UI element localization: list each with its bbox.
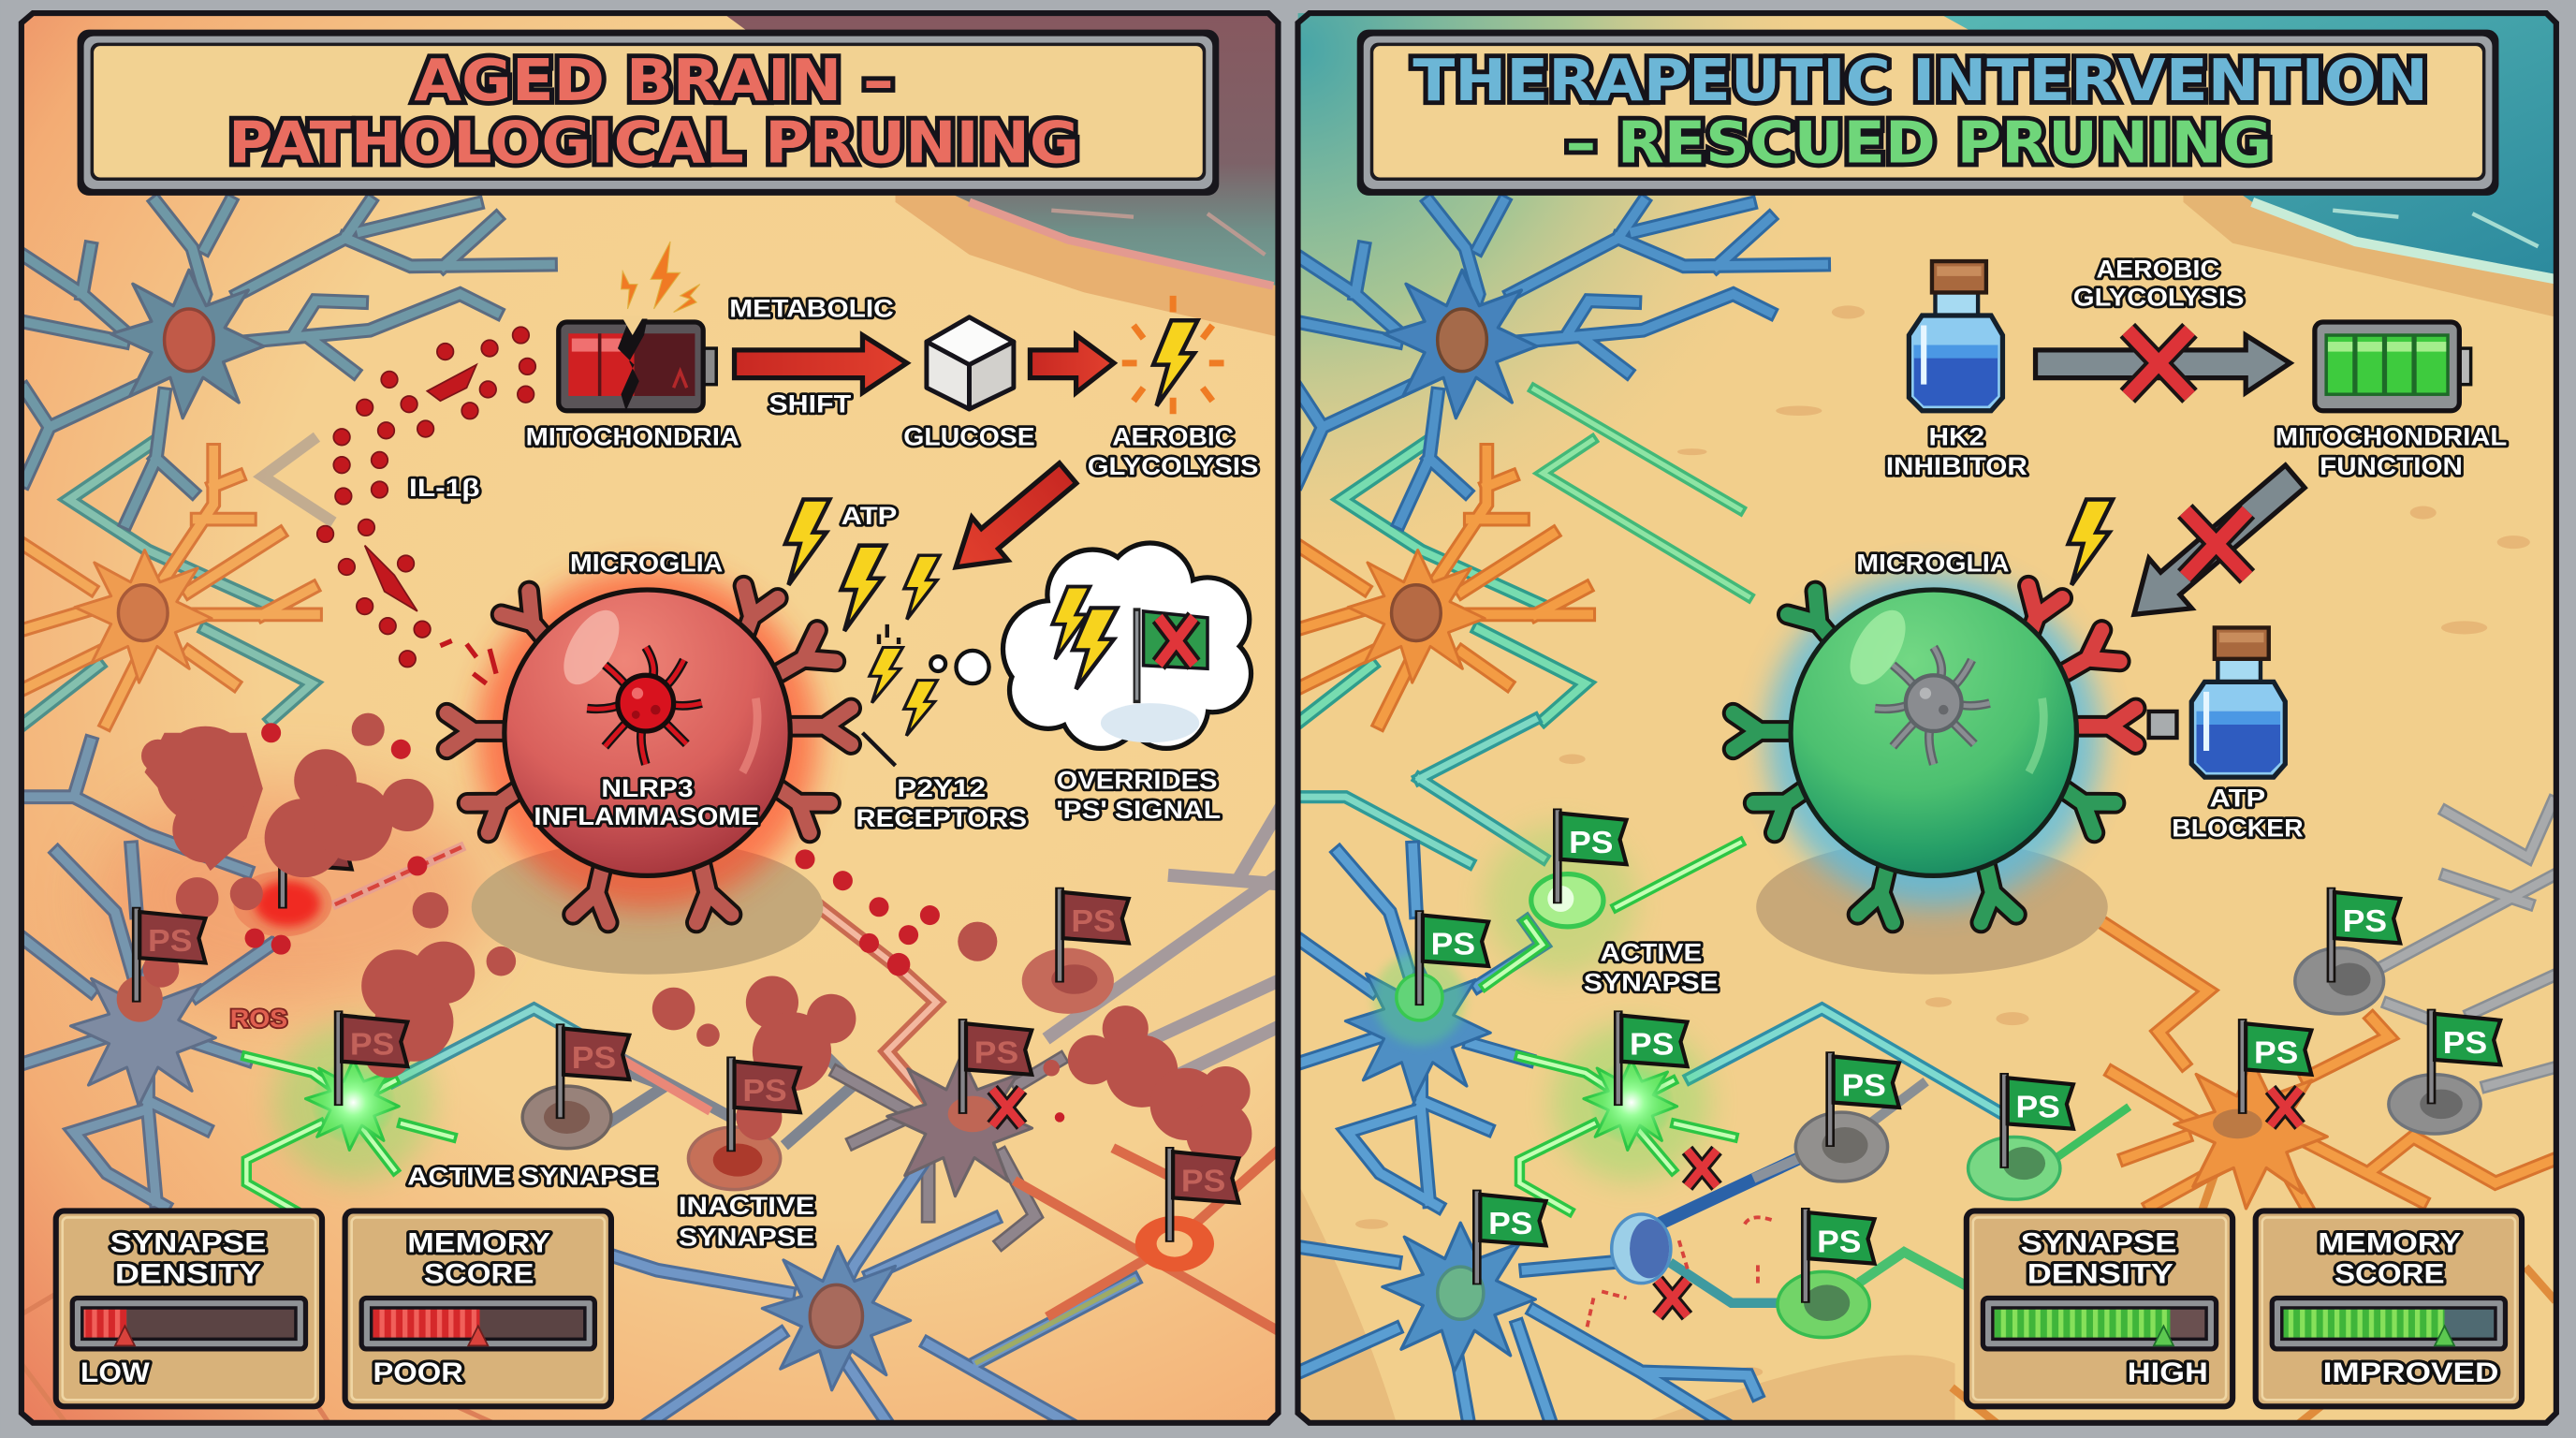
labels: therapeutic panel: HK2 (1928, 422, 1984, 451)
labels: therapeutic panel: FUNCTION (2320, 451, 2463, 480)
flags: phosphatidylserine eat-me signals, aged: PS (572, 1041, 616, 1076)
flags: phosphatidylserine eat-me signals, aged: PS (350, 1028, 394, 1063)
icon: ATP bolt (2069, 500, 2113, 585)
icon: silenced inflammasome (1875, 647, 1990, 764)
panel: therapeutic intervention (1298, 13, 2556, 1423)
labels: aged panel: 'PS' SIGNAL (1057, 795, 1221, 824)
thought cloud: overrides PS signal (930, 546, 1249, 746)
neuron network background (22, 202, 1278, 1423)
arrow: glucose to glycolysis (1030, 335, 1114, 392)
left panel background (22, 13, 1278, 1423)
flags: phosphatidylserine signals, rescued: PS (2343, 904, 2387, 939)
arrow: blocked aerobic glycolysis (2036, 330, 2291, 396)
stat panel: memory score poor (345, 1211, 611, 1406)
labels: aged panel: RECEPTORS (856, 803, 1027, 832)
labels: aged panel: METABOLIC (729, 294, 894, 323)
labels: aged panel: OVERRIDES (1057, 765, 1218, 794)
flags: phosphatidylserine eat-me signals, aged: PS (1181, 1164, 1225, 1198)
labels: aged panel: ATP (842, 501, 897, 530)
connector: ATP blocker to receptor (2149, 712, 2176, 738)
icon: NLRP3 inflammasome (587, 647, 702, 764)
icon: healthy mitochondrial battery (2315, 322, 2471, 411)
labels: aged panel: MICROGLIA (570, 549, 723, 578)
flags: phosphatidylserine signals, rescued: PS (1431, 928, 1475, 962)
labels: therapeutic panel: BLOCKER (2172, 813, 2304, 842)
flags: phosphatidylserine signals, rescued (1419, 808, 2500, 1303)
icon: blocked P2Y12 receptors (2007, 586, 2136, 744)
flags: phosphatidylserine signals, rescued: PS (1817, 1225, 1862, 1259)
stat panel: memory score improved: IMPROVED (2323, 1357, 2498, 1388)
microglia: aged red (446, 568, 851, 922)
title text: THERAPEUTIC INTERVENTION (1412, 48, 2428, 114)
labels: aged panel: AEROBIC (1112, 422, 1234, 451)
title text: AGED BRAIN – (414, 48, 894, 114)
title text: – RESCUED PRUNING (1566, 110, 2272, 177)
stat panel: memory score poor: POOR (373, 1357, 463, 1388)
stat panel: memory score poor: SCORE (424, 1259, 534, 1290)
panel: aged brain (22, 13, 1278, 1423)
labels: therapeutic panel: MICROGLIA (1856, 549, 2009, 578)
title text (1412, 48, 2428, 177)
ROS damage clouds (141, 726, 1251, 1167)
stat panel: memory score improved (2256, 1211, 2522, 1406)
arrow: glycolysis to ATP (938, 452, 1086, 589)
arrow: blocked ATP signal (2113, 451, 2317, 639)
stat panel: memory score poor: MEMORY (407, 1227, 550, 1258)
synapse glows and blobs (117, 871, 1214, 1271)
microglia shadow (1756, 840, 2108, 975)
flags: phosphatidylserine signals, rescued: PS (2254, 1036, 2298, 1071)
labels: aged panel: ACTIVE SYNAPSE (407, 1161, 657, 1190)
labels: aged panel: SYNAPSE (679, 1222, 815, 1251)
flags: phosphatidylserine signals, rescued: PS (1569, 826, 1613, 860)
stat panel: synapse density low: LOW (80, 1357, 151, 1388)
stat panel: synapse density high: DENSITY (2027, 1259, 2174, 1290)
right panel background (1298, 13, 2556, 1423)
labels: aged panel: P2Y12 (897, 773, 986, 802)
flags: phosphatidylserine signals, rescued: PS (1841, 1069, 1886, 1104)
blue engulfed bouton (1612, 1214, 1671, 1284)
stat panel: synapse density low: SYNAPSE (110, 1227, 266, 1258)
flags: phosphatidylserine eat-me signals, aged: PS (148, 924, 192, 959)
icon: ATP blocker vial (2191, 627, 2285, 777)
flags: phosphatidylserine signals, rescued: PS (2443, 1026, 2487, 1061)
labels: aged panel (230, 294, 1258, 1251)
ROS debris dots (230, 713, 1064, 1123)
icons: red X marks on pruned branches (1658, 1090, 2300, 1316)
title box: therapeutic intervention (1357, 30, 2498, 196)
flags: phosphatidylserine eat-me signals, aged (137, 888, 1238, 1242)
icon: sparks above battery (621, 242, 700, 312)
icon: HK2 inhibitor vial (1909, 261, 2002, 411)
icon: aerobic glycolysis bolt (1122, 296, 1224, 414)
icon: glucose cube (927, 317, 1014, 409)
stat panel: synapse density high (1967, 1211, 2232, 1406)
synapse glows and blobs (1373, 825, 2481, 1338)
flags: phosphatidylserine signals, rescued: PS (2015, 1090, 2060, 1124)
stat panel: synapse density high: SYNAPSE (2021, 1227, 2176, 1258)
microglia: rescued green (1734, 572, 2136, 922)
icon: ATP bolts (785, 500, 940, 736)
labels: aged panel: GLYCOLYSIS (1088, 451, 1258, 480)
flags: phosphatidylserine eat-me signals, aged: PS (1071, 904, 1116, 939)
labels: aged panel: NLRP3 (601, 773, 694, 802)
title text: PATHOLOGICAL PRUNING (228, 110, 1079, 177)
arrow: metabolic shift (735, 335, 907, 392)
microglia shadow (472, 840, 823, 975)
labels: aged panel: GLUCOSE (903, 422, 1035, 451)
flags: phosphatidylserine eat-me signals, aged: PS (742, 1074, 787, 1108)
pointer: P2Y12 receptors (862, 733, 896, 766)
icon: damaged mitochondria battery (559, 315, 716, 411)
labels: therapeutic panel: AEROBIC (2096, 255, 2219, 284)
stat panel: synapse density high: HIGH (2128, 1357, 2208, 1388)
labels: aged panel: MITOCHONDRIA (526, 422, 739, 451)
flag: hidden under ROS cloud (283, 814, 352, 909)
title box: aged brain (78, 30, 1219, 196)
labels: aged panel: INFLAMMASOME (534, 801, 759, 830)
labels: aged panel: IL-1β (409, 473, 480, 502)
labels: therapeutic panel: GLYCOLYSIS (2073, 282, 2244, 311)
labels: therapeutic panel: SYNAPSE (1584, 967, 1719, 996)
icon: red X on synapse (992, 1090, 1022, 1125)
labels: aged panel: SHIFT (768, 389, 852, 418)
labels: therapeutic panel: INHIBITOR (1886, 451, 2027, 480)
stat panel: memory score improved: SCORE (2334, 1259, 2445, 1290)
title text (228, 48, 1079, 177)
stat panel: synapse density low: DENSITY (115, 1259, 261, 1290)
flags: phosphatidylserine signals, rescued: PS (1630, 1028, 1674, 1063)
labels: aged panel: ROS (230, 1004, 287, 1033)
stat panel: synapse density low (56, 1211, 322, 1406)
labels: therapeutic panel: ACTIVE (1600, 938, 1702, 967)
labels: therapeutic panel: MITOCHONDRIAL (2276, 422, 2507, 451)
labels: therapeutic panel: ATP (2210, 784, 2265, 813)
flags: phosphatidylserine signals, rescued: PS (1488, 1207, 1532, 1241)
labels: therapeutic panel (1584, 255, 2507, 996)
labels: aged panel: INACTIVE (679, 1191, 815, 1220)
stat panel: memory score improved: MEMORY (2318, 1227, 2461, 1258)
neuron network background (1298, 202, 2553, 1423)
flags: phosphatidylserine eat-me signals, aged: PS (974, 1036, 1018, 1071)
IL-1β cytokine dots (317, 327, 535, 683)
